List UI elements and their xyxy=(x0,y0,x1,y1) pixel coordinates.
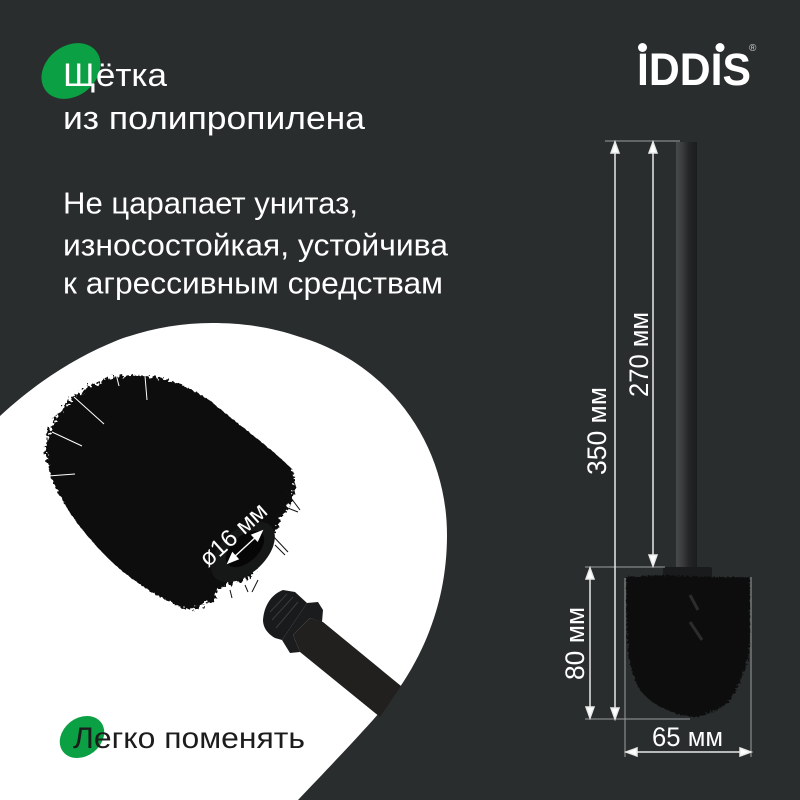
collar xyxy=(663,567,712,579)
bristle head xyxy=(626,575,750,717)
rod collar xyxy=(282,602,323,653)
heading xyxy=(63,57,365,136)
core highlights xyxy=(690,595,702,640)
caption: Легко поменять xyxy=(73,722,305,755)
brush head with socket xyxy=(46,374,300,610)
heading: из полипропилена xyxy=(63,100,365,136)
rod shaft xyxy=(293,618,401,717)
panel: white product circle xyxy=(0,323,447,800)
product: full brush xyxy=(626,142,750,717)
loose bristle tips xyxy=(230,470,300,598)
dimensions xyxy=(585,141,751,757)
diameter label: ø16 мм xyxy=(194,498,273,572)
heading: Щётка xyxy=(63,57,167,93)
logo: IDDIS xyxy=(637,44,751,95)
description text: к агрессивным средствам xyxy=(63,266,443,300)
description text: Не царапает унитаз, xyxy=(63,186,358,220)
arrow: 350 mm xyxy=(611,142,619,719)
highlights on bristles xyxy=(48,374,147,476)
label: 80 mm: 80 мм xyxy=(560,607,590,680)
arrow: 270 mm xyxy=(649,142,657,566)
handle stem xyxy=(676,142,697,568)
threaded rod xyxy=(263,590,401,717)
diameter arrow xyxy=(228,531,262,563)
label: 65 mm: 65 мм xyxy=(652,722,723,752)
rod thread xyxy=(263,590,307,640)
logo: ® xyxy=(749,43,757,54)
brush bristles xyxy=(46,375,294,610)
label: 350 mm: 350 мм xyxy=(582,387,612,475)
socket hole xyxy=(219,524,271,574)
description text xyxy=(63,186,449,300)
guide lines xyxy=(585,141,751,757)
arrow: 65 mm xyxy=(626,748,751,756)
label: 270 mm: 270 мм xyxy=(624,312,654,397)
socket ring xyxy=(200,510,286,594)
arrow: 80 mm xyxy=(586,568,594,718)
green blob: heading xyxy=(30,32,112,110)
description text: износостойкая, устойчива xyxy=(63,228,449,262)
green blob: caption xyxy=(51,707,113,767)
